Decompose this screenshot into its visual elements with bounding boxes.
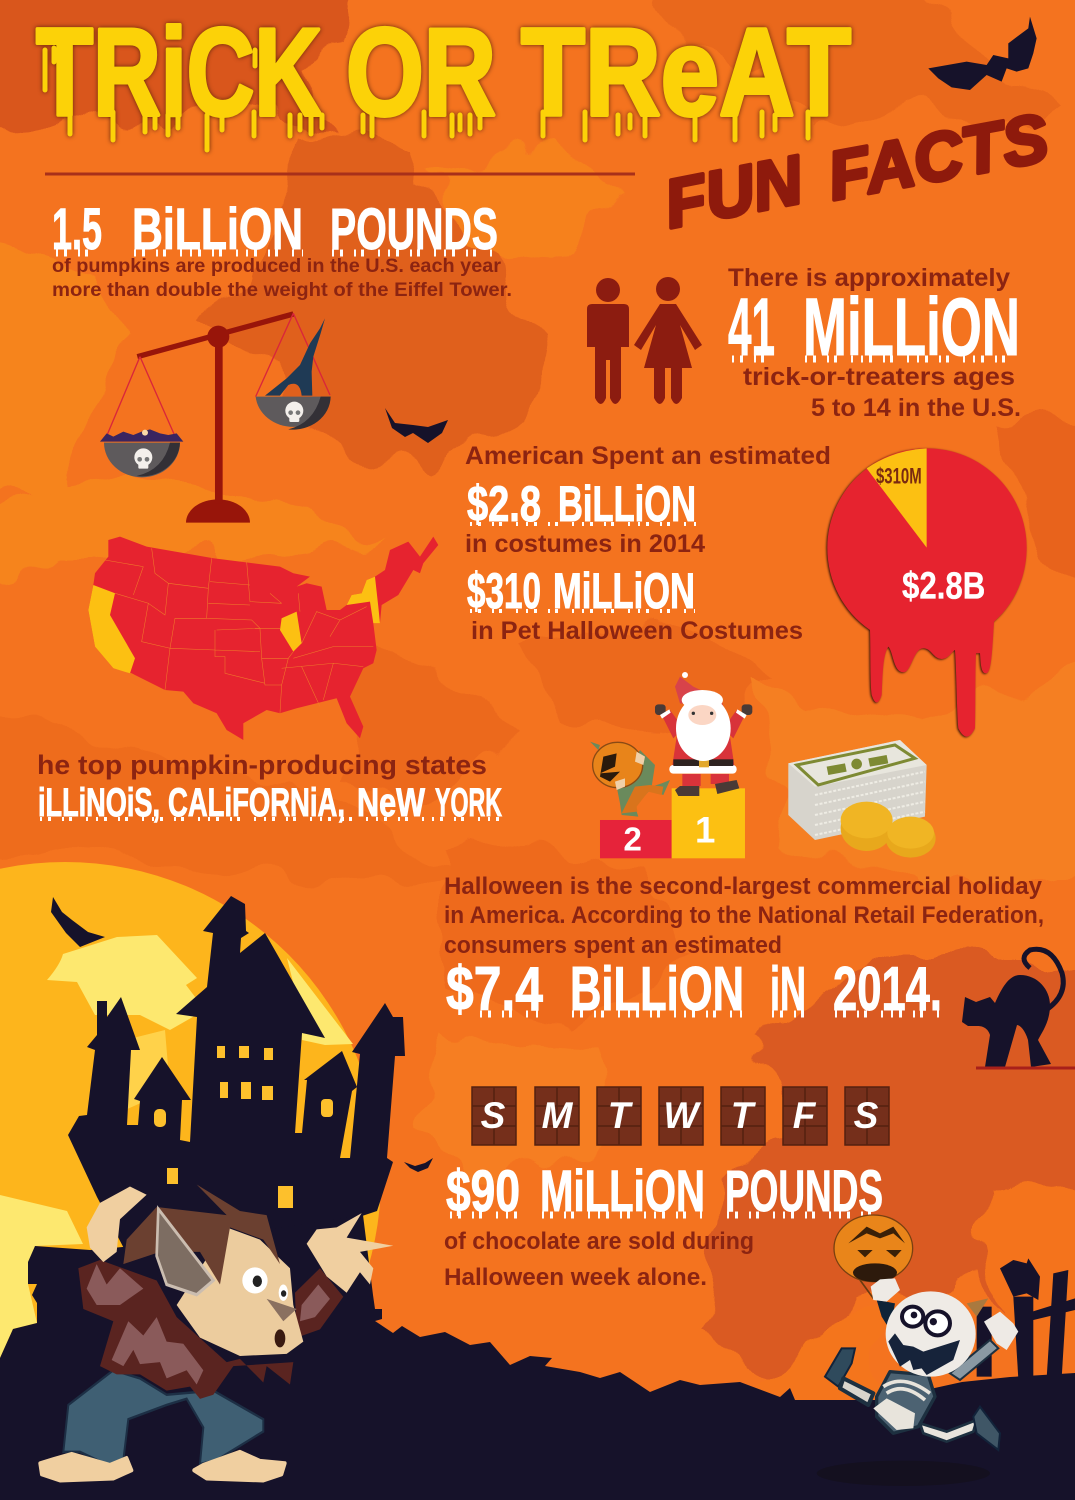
skeleton character with pumpkin (817, 1215, 1075, 1486)
fact: trick-or-treaters (728, 264, 1021, 422)
fact: spending on costumes: BiLLiON (558, 476, 696, 532)
fact: second-largest holiday (444, 873, 1044, 1024)
ground silhouette (0, 1215, 1075, 1500)
fact: chocolate: of chocolate are sold during (444, 1228, 754, 1255)
money stack and coins (788, 740, 936, 858)
fact: trick-or-treaters: trick-or-treaters ages (743, 363, 1015, 391)
fact: pumpkin pounds: BiLLiON (132, 197, 303, 262)
chocolate bars: days of the week: M (542, 1095, 574, 1136)
small bat by the house (404, 1158, 433, 1172)
dripping pie chart (827, 448, 1027, 737)
fact: spending on costumes (465, 442, 831, 645)
werewolf character (40, 1185, 393, 1480)
subtitle: fun facts: FACTS (822, 100, 1054, 215)
fact: top pumpkin states: iLLiNOiS, (38, 781, 160, 825)
chocolate bars: days of the week: S (854, 1095, 879, 1136)
fact: second-largest holiday: Halloween is the second-largest commercial holiday (444, 873, 1043, 900)
fact: second-largest holiday: BiLLiON (570, 955, 744, 1024)
podium with santa and pumpkin man (590, 672, 752, 859)
fact: second-largest holiday: 2014. (833, 955, 942, 1024)
dripping pie chart: $2.8B (902, 565, 985, 607)
chocolate bars: days of the week: F (793, 1095, 817, 1136)
chocolate bars: days of the week: T (731, 1095, 757, 1136)
fact: top pumpkin states (37, 750, 502, 825)
title: OR (346, 4, 496, 142)
fact: pumpkin pounds: POUNDS (330, 197, 498, 262)
title: TReAT (521, 4, 851, 142)
podium with santa and pumpkin man: 1 (695, 810, 715, 851)
fact: top pumpkin states: he top pumpkin-producing states (37, 750, 487, 780)
fact: second-largest holiday: consumers spent an estimated (444, 932, 782, 959)
fact: second-largest holiday: $7.4 (446, 955, 543, 1024)
fact: trick-or-treaters: There is approximately (728, 264, 1010, 292)
fact: spending on costumes: American Spent an estimated (465, 442, 831, 470)
fact: second-largest holiday: iN (770, 955, 806, 1024)
fact: second-largest holiday: in America. According to the National Retail Federation, (444, 902, 1044, 929)
chocolate bars: days of the week: T (608, 1095, 634, 1136)
chocolate bars: days of the week: W (664, 1095, 702, 1136)
title divider (45, 172, 635, 176)
subtitle: fun facts (658, 100, 1054, 243)
chocolate bars: days of the week: S (481, 1095, 506, 1136)
haunted house silhouette (68, 896, 405, 1260)
fact: top pumpkin states: CALiFORNiA, (168, 781, 345, 825)
fact: spending on costumes: in costumes in 2014 (465, 530, 705, 558)
subtitle: fun facts: FUN (658, 141, 810, 243)
fact: spending on costumes: $2.8 (467, 476, 541, 532)
fact: trick-or-treaters: 41 (728, 282, 775, 373)
bat top right (928, 17, 1037, 90)
fact: chocolate: $90 (446, 1159, 520, 1224)
title: TRiCK (36, 4, 322, 142)
title (36, 4, 851, 150)
moon (0, 862, 381, 1494)
map of the United States (88, 537, 438, 740)
fact: top pumpkin states: YORK (435, 781, 502, 825)
fact: spending on costumes: MiLLiON (553, 563, 695, 619)
icon: black cat (962, 949, 1075, 1068)
fact: chocolate: POUNDS (725, 1159, 883, 1224)
bat over the moon (51, 897, 105, 947)
fact: chocolate (444, 1159, 883, 1291)
dripping pie chart: $310M (876, 464, 922, 489)
balance scale (100, 313, 331, 523)
fact: spending on costumes: $310 (467, 563, 541, 619)
fact: chocolate: MiLLiON (540, 1159, 705, 1224)
bat near scale (385, 408, 448, 443)
fact: pumpkin pounds (52, 197, 512, 301)
icon: man and woman (587, 277, 702, 404)
fact: trick-or-treaters: 5 to 14 in the U.S. (811, 394, 1021, 422)
fact: spending on costumes: in Pet Halloween Costumes (471, 617, 803, 645)
podium with santa and pumpkin man: 2 (623, 822, 642, 859)
fact: chocolate: Halloween week alone. (444, 1264, 707, 1291)
fact: pumpkin pounds: more than double the weight of the Eiffel Tower. (52, 280, 512, 301)
chocolate bars: days of the week (472, 1087, 889, 1145)
fact: pumpkin pounds: of pumpkins are produced in the U.S. each year (52, 256, 502, 277)
fact: pumpkin pounds: 1.5 (52, 197, 102, 262)
fact: top pumpkin states: NeW (357, 781, 425, 825)
